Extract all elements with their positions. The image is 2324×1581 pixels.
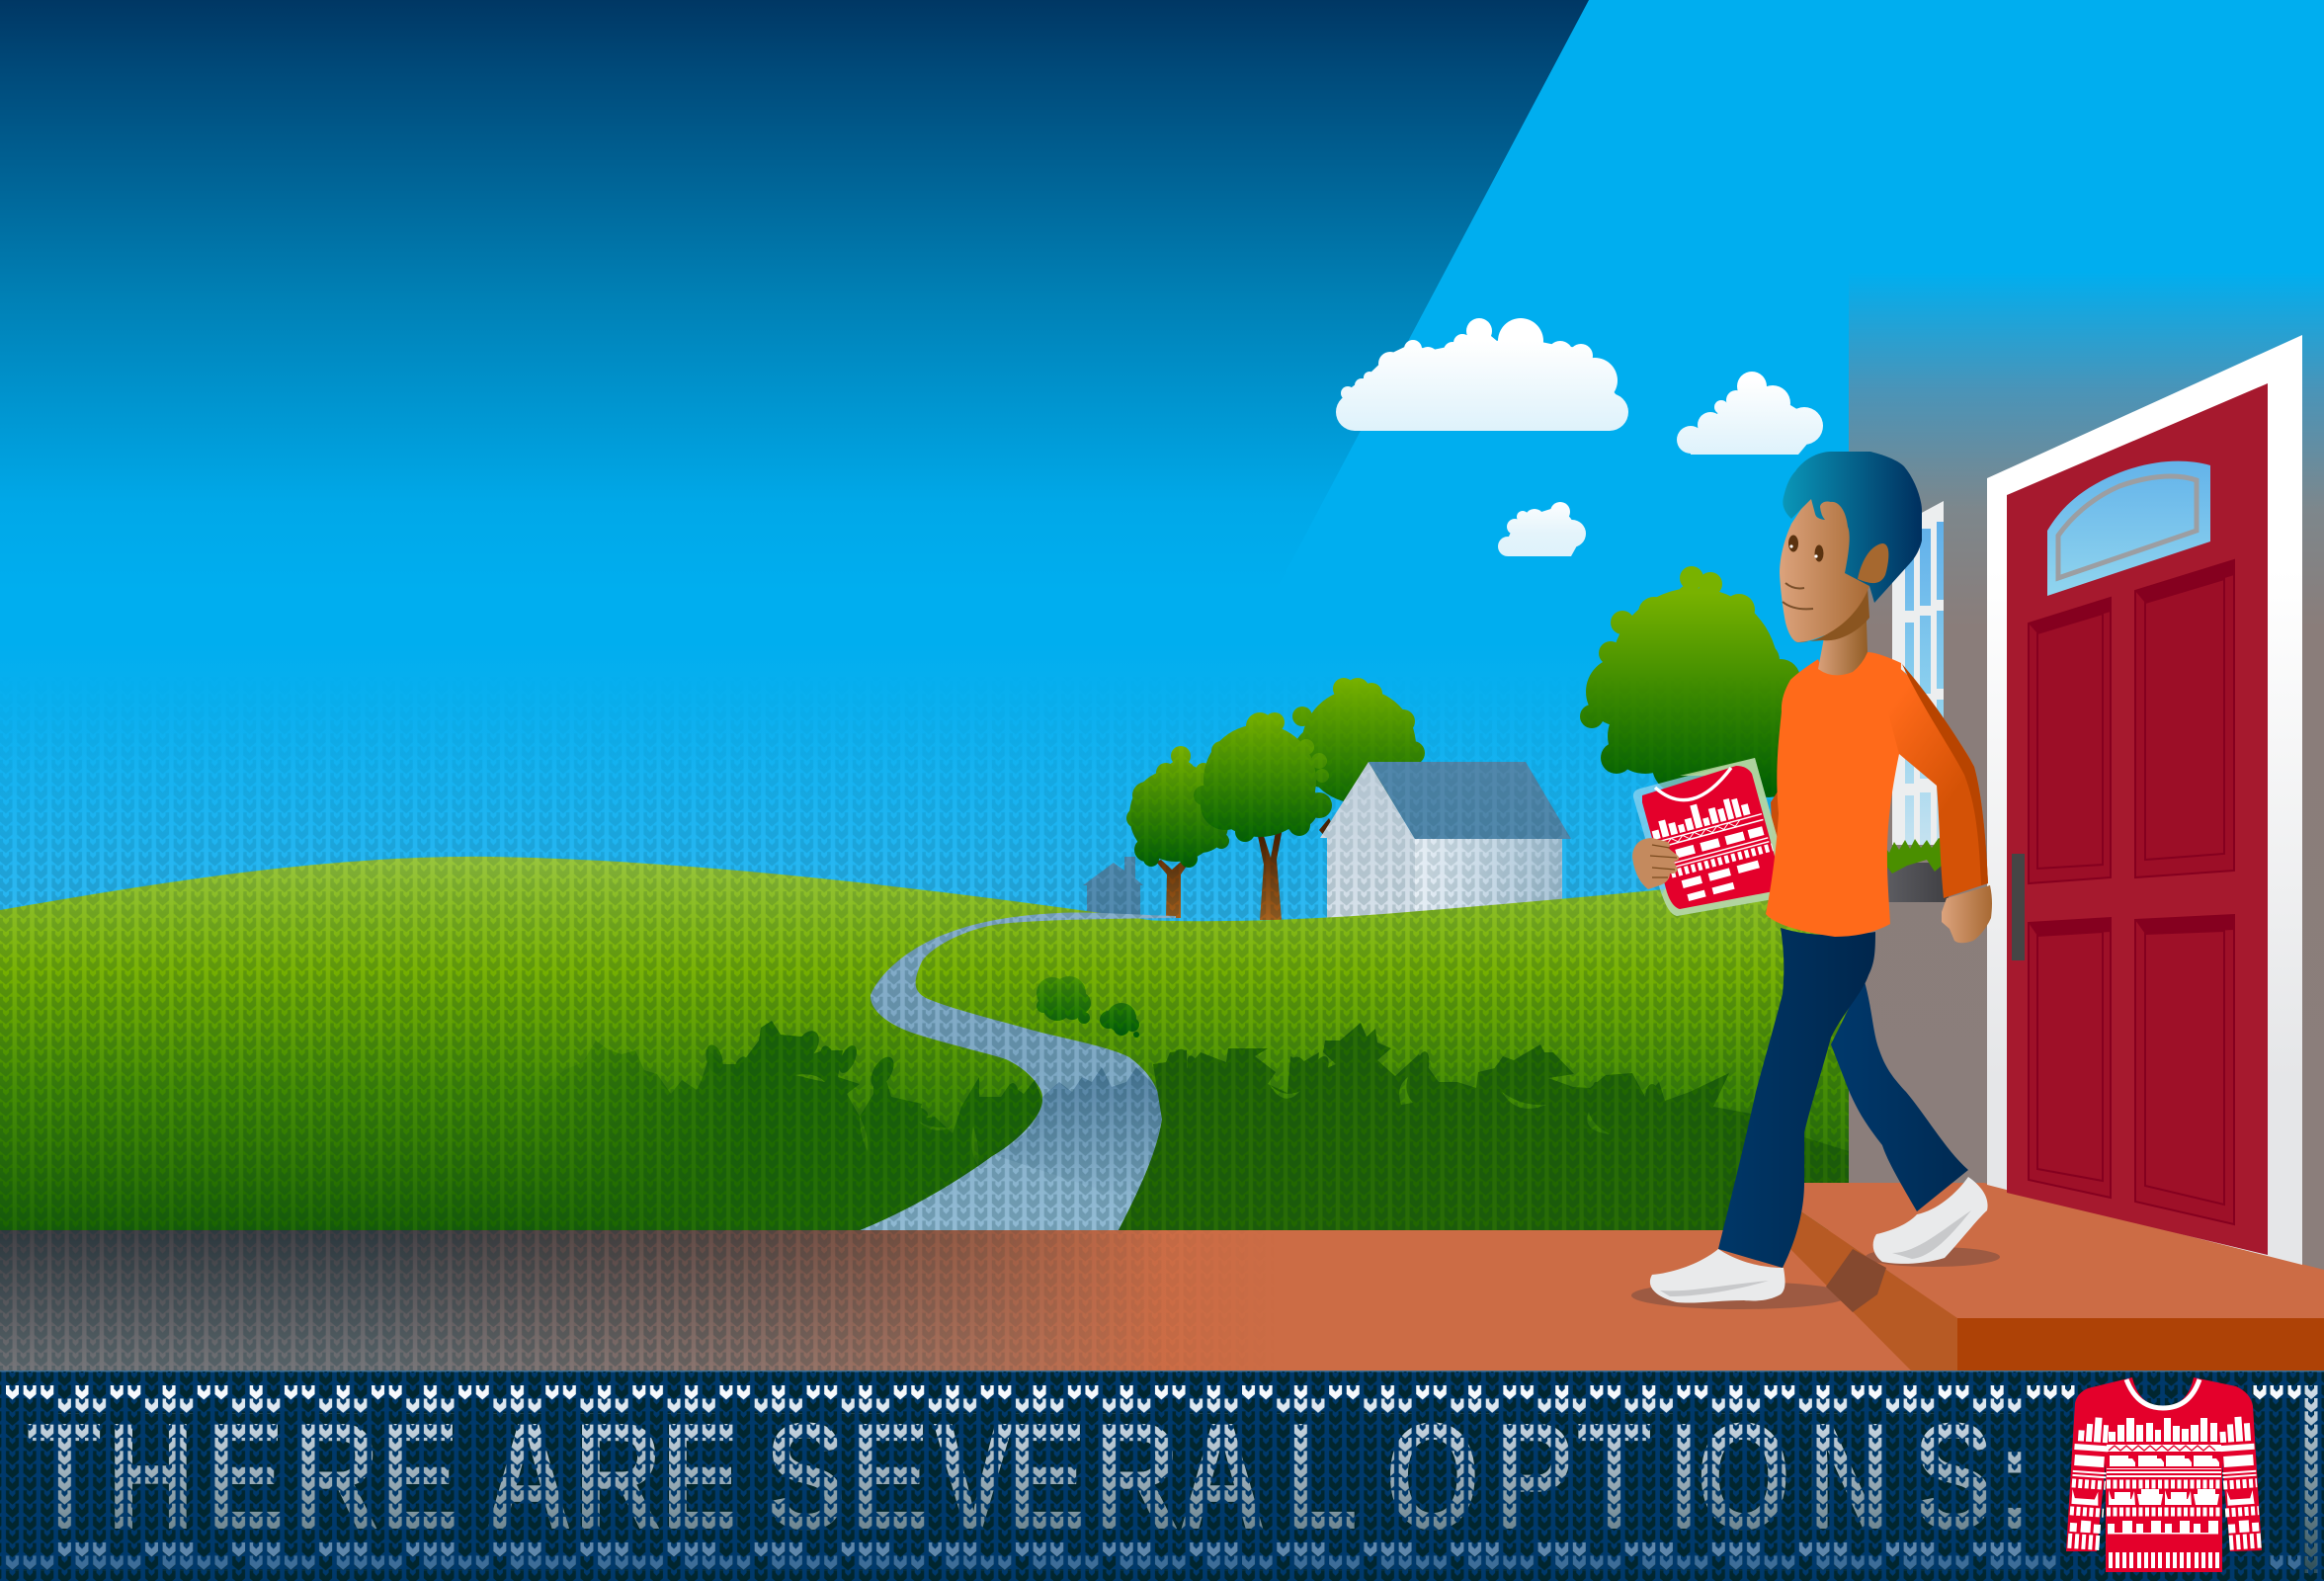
house wall (1849, 272, 2324, 1285)
door arched window (2047, 461, 2210, 596)
knit dots row 1 (2107, 1480, 2221, 1488)
cranes and containers (2108, 1521, 2218, 1534)
right hedge (1119, 1023, 1849, 1230)
step side face (1784, 1208, 1957, 1372)
jaw shadow (1795, 586, 1869, 642)
tree: back (1292, 678, 1425, 838)
cloud: large (1336, 318, 1628, 431)
red mini sweater (1642, 766, 1776, 909)
skyline (2109, 1418, 2217, 1442)
door panel: lower right (2135, 915, 2234, 1224)
background: sky (0, 0, 2324, 939)
right hand (1942, 885, 1992, 943)
gable wall (1320, 762, 1415, 919)
door panel: lower left (2029, 918, 2111, 1198)
plastic wrap (1633, 758, 1782, 916)
door panel: upper left (2029, 598, 2111, 883)
front leg (1718, 928, 1875, 1268)
side wall (1415, 839, 1562, 923)
ear (1858, 543, 1888, 583)
road shaded area (998, 1067, 1162, 1203)
bushes on the lawn (1037, 976, 1139, 1038)
door frame (1987, 335, 2302, 1265)
knit texture over scene (0, 740, 1849, 1230)
left sleeve pattern (2067, 1416, 2111, 1550)
person (1631, 452, 2000, 1312)
step front face (1957, 1318, 2324, 1372)
front shoe (1650, 1249, 1785, 1303)
cloud: small (1498, 502, 1586, 556)
tree: middle (1194, 712, 1332, 920)
sidewalk (0, 1230, 1957, 1371)
door panel: upper right (2135, 560, 2234, 877)
top stitched border (4, 1385, 2300, 1413)
bottom stitched border (4, 1542, 2300, 1570)
neck (1818, 593, 1868, 675)
mini collar (1655, 768, 1731, 800)
face (1780, 494, 1869, 642)
shirt (1766, 652, 1901, 937)
ships (2109, 1489, 2219, 1505)
collar (2126, 1379, 2200, 1408)
right sleeve pattern (2218, 1416, 2262, 1550)
right stitched column (2304, 1385, 2318, 1573)
truss band (2107, 1445, 2221, 1452)
white house (1320, 762, 1571, 923)
knit title band (0, 1371, 2324, 1581)
cloud: medium (1677, 372, 1823, 455)
arm (1872, 654, 1988, 898)
dark sky wedge (0, 0, 1589, 593)
leaf gaps in hedges (795, 1074, 1611, 1166)
mini sweater pattern (1648, 788, 1781, 906)
knit texture on sidewalk (0, 1230, 1285, 1372)
shadows (1631, 1247, 2000, 1312)
sweater package (1633, 758, 1782, 916)
icon: red holiday sweater (2066, 1377, 2262, 1572)
back leg (1831, 978, 1968, 1211)
right hill (790, 870, 1849, 1230)
holding hand (1632, 838, 1679, 889)
title text: THERE ARE SEVERAL OPTIONS: (27, 1391, 2034, 1561)
tree: left (1126, 746, 1229, 918)
step top (1796, 1183, 2324, 1318)
eyes (1788, 536, 1824, 561)
door handle (2012, 854, 2025, 960)
porch step (1784, 1183, 2324, 1372)
head (1780, 452, 1922, 642)
waist ribbing (2109, 1552, 2219, 1568)
planter (1883, 838, 1949, 902)
trucks (2107, 1456, 2221, 1477)
back shoe (1873, 1177, 1988, 1264)
winding road (860, 912, 1176, 1230)
hair (1783, 452, 1922, 603)
knit dots row 2 (2107, 1508, 2221, 1516)
left hill (0, 857, 1156, 1230)
far house (1083, 857, 1143, 916)
door (2007, 383, 2268, 1255)
big tree behind person (1580, 566, 1800, 953)
rear arm (1771, 781, 1784, 870)
nose and mouth (1783, 583, 1813, 609)
roof (1369, 762, 1571, 839)
wall window (1892, 501, 1944, 845)
grey fade on sidewalk (0, 1230, 1139, 1371)
left hedge (524, 1021, 1042, 1230)
